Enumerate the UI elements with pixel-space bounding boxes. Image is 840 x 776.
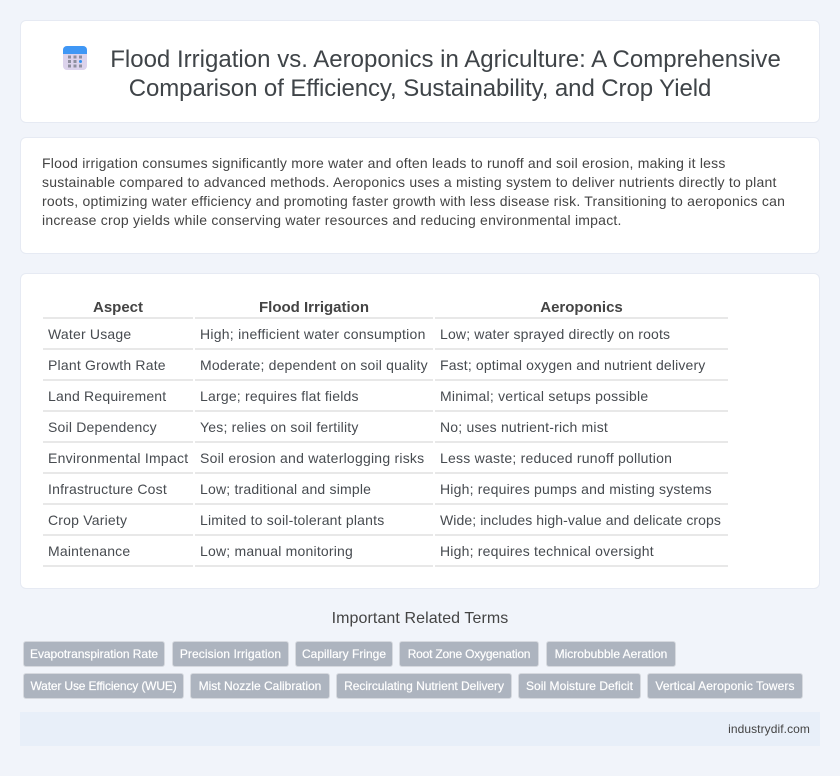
column headers [43, 299, 728, 567]
comparison table: Low; water sprayed directly on roots [440, 326, 670, 342]
intro paragraph: roots, optimizing water efficiency and promoting faster growth with less disease risk. Transitioning to aeroponics can [42, 193, 785, 209]
panel: title card [20, 20, 820, 123]
comparison table: No; uses nutrient-rich mist [440, 419, 608, 435]
comparison table: Plant Growth Rate [48, 357, 166, 373]
related terms tags: Water Use Efficiency (WUE) [30, 679, 177, 693]
related terms tags: Soil Moisture Deficit [526, 679, 633, 693]
related terms tags: Recirculating Nutrient Delivery [344, 679, 504, 693]
comparison table: Moderate; dependent on soil quality [200, 357, 428, 373]
panel: table card [20, 273, 820, 589]
related terms tags: Precision Irrigation [180, 647, 281, 661]
comparison table: Less waste; reduced runoff pollution [440, 450, 672, 466]
related terms tags: Evapotranspiration Rate [30, 647, 158, 661]
comparison table: Limited to soil-tolerant plants [200, 512, 384, 528]
comparison table: Fast; optimal oxygen and nutrient delivery [440, 357, 705, 373]
column headers: Aeroponics [540, 299, 623, 316]
icon: calendar grid [63, 46, 87, 70]
comparison table: Infrastructure Cost [48, 481, 167, 497]
intro paragraph: Flood irrigation consumes significantly more water and often leads to runoff and soil erosion, making it less [42, 155, 726, 171]
comparison table: Minimal; vertical setups possible [440, 388, 648, 404]
panel: intro card [20, 137, 820, 254]
intro paragraph [42, 155, 785, 228]
footer source: industrydif.com [728, 722, 810, 736]
comparison table: Low; manual monitoring [200, 543, 353, 559]
comparison table: Environmental Impact [48, 450, 188, 466]
related terms heading: Important Related Terms [332, 610, 508, 627]
comparison table: High; inefficient water consumption [200, 326, 426, 342]
column headers: Flood Irrigation [259, 299, 369, 316]
comparison table: High; requires pumps and misting systems [440, 481, 712, 497]
footer bar [20, 712, 820, 746]
comparison table: Maintenance [48, 543, 130, 559]
intro paragraph: increase crop yields while conserving water resources and reducing environmental impact. [42, 212, 622, 228]
intro paragraph: sustainable compared to advanced methods. Aeroponics uses a misting system to deliver nutrients directly to plant [42, 174, 777, 190]
comparison table: Soil Dependency [48, 419, 157, 435]
comparison table: Wide; includes high-value and delicate crops [440, 512, 721, 528]
comparison table: Large; requires flat fields [200, 388, 359, 404]
related terms tags: Vertical Aeroponic Towers [655, 679, 795, 693]
related terms tags: Microbubble Aeration [555, 647, 667, 661]
comparison table [43, 299, 728, 567]
comparison table: High; requires technical oversight [440, 543, 654, 559]
comparison table: Low; traditional and simple [200, 481, 371, 497]
comparison table: Soil erosion and waterlogging risks [200, 450, 424, 466]
title: Comparison of Efficiency, Sustainability, and Crop Yield [129, 75, 711, 102]
related terms tags: Mist Nozzle Calibration [199, 679, 321, 693]
related terms tags [23, 641, 803, 699]
comparison table: Yes; relies on soil fertility [200, 419, 359, 435]
comparison table: Crop Variety [48, 512, 127, 528]
comparison table: Land Requirement [48, 388, 166, 404]
related terms tags: Capillary Fringe [302, 647, 386, 661]
comparison table: Water Usage [48, 326, 131, 342]
related terms tags: Root Zone Oxygenation [408, 647, 530, 661]
column headers: Aspect [93, 299, 143, 316]
title [110, 46, 781, 102]
title: Flood Irrigation vs. Aeroponics in Agriculture: A Comprehensive [110, 46, 781, 73]
